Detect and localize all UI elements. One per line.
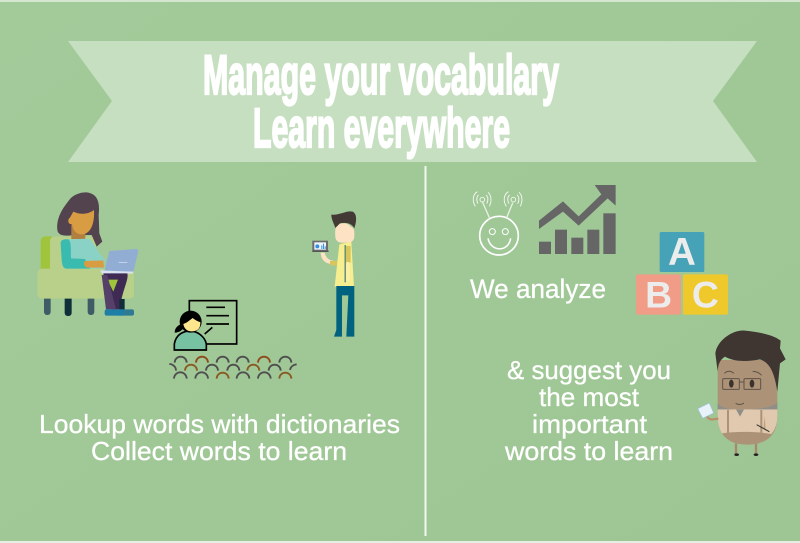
icon: ABC blocks: B (645, 274, 672, 316)
icon: smiley with antennae (473, 192, 522, 255)
suggestion caption: important (532, 409, 648, 439)
title banner (68, 41, 757, 162)
title (203, 43, 559, 159)
icon: woman on armchair with laptop (37, 192, 138, 316)
left caption (39, 409, 400, 466)
suggestion caption: & suggest you (507, 355, 671, 385)
title: Learn everywhere (253, 96, 510, 159)
suggestion caption (504, 355, 673, 466)
crowd (169, 357, 297, 379)
icons: smiley, chart, blocks (473, 185, 728, 316)
icon: ABC blocks: A (668, 231, 696, 274)
left caption: Lookup words with dictionaries (39, 409, 400, 439)
icon: teacher at whiteboard (174, 301, 237, 350)
suggestion caption: the most (539, 382, 640, 412)
divider (424, 166, 426, 536)
suggestion caption: words to learn (504, 436, 673, 466)
we analyze caption: We analyze (470, 274, 606, 304)
icon: growth chart (539, 185, 616, 254)
icon: man holding tablet (169, 211, 356, 379)
icon: man with glasses and book (698, 331, 786, 456)
left caption: Collect words to learn (91, 436, 347, 466)
icon: ABC blocks (636, 231, 728, 316)
icon: ABC blocks: C (692, 274, 719, 316)
